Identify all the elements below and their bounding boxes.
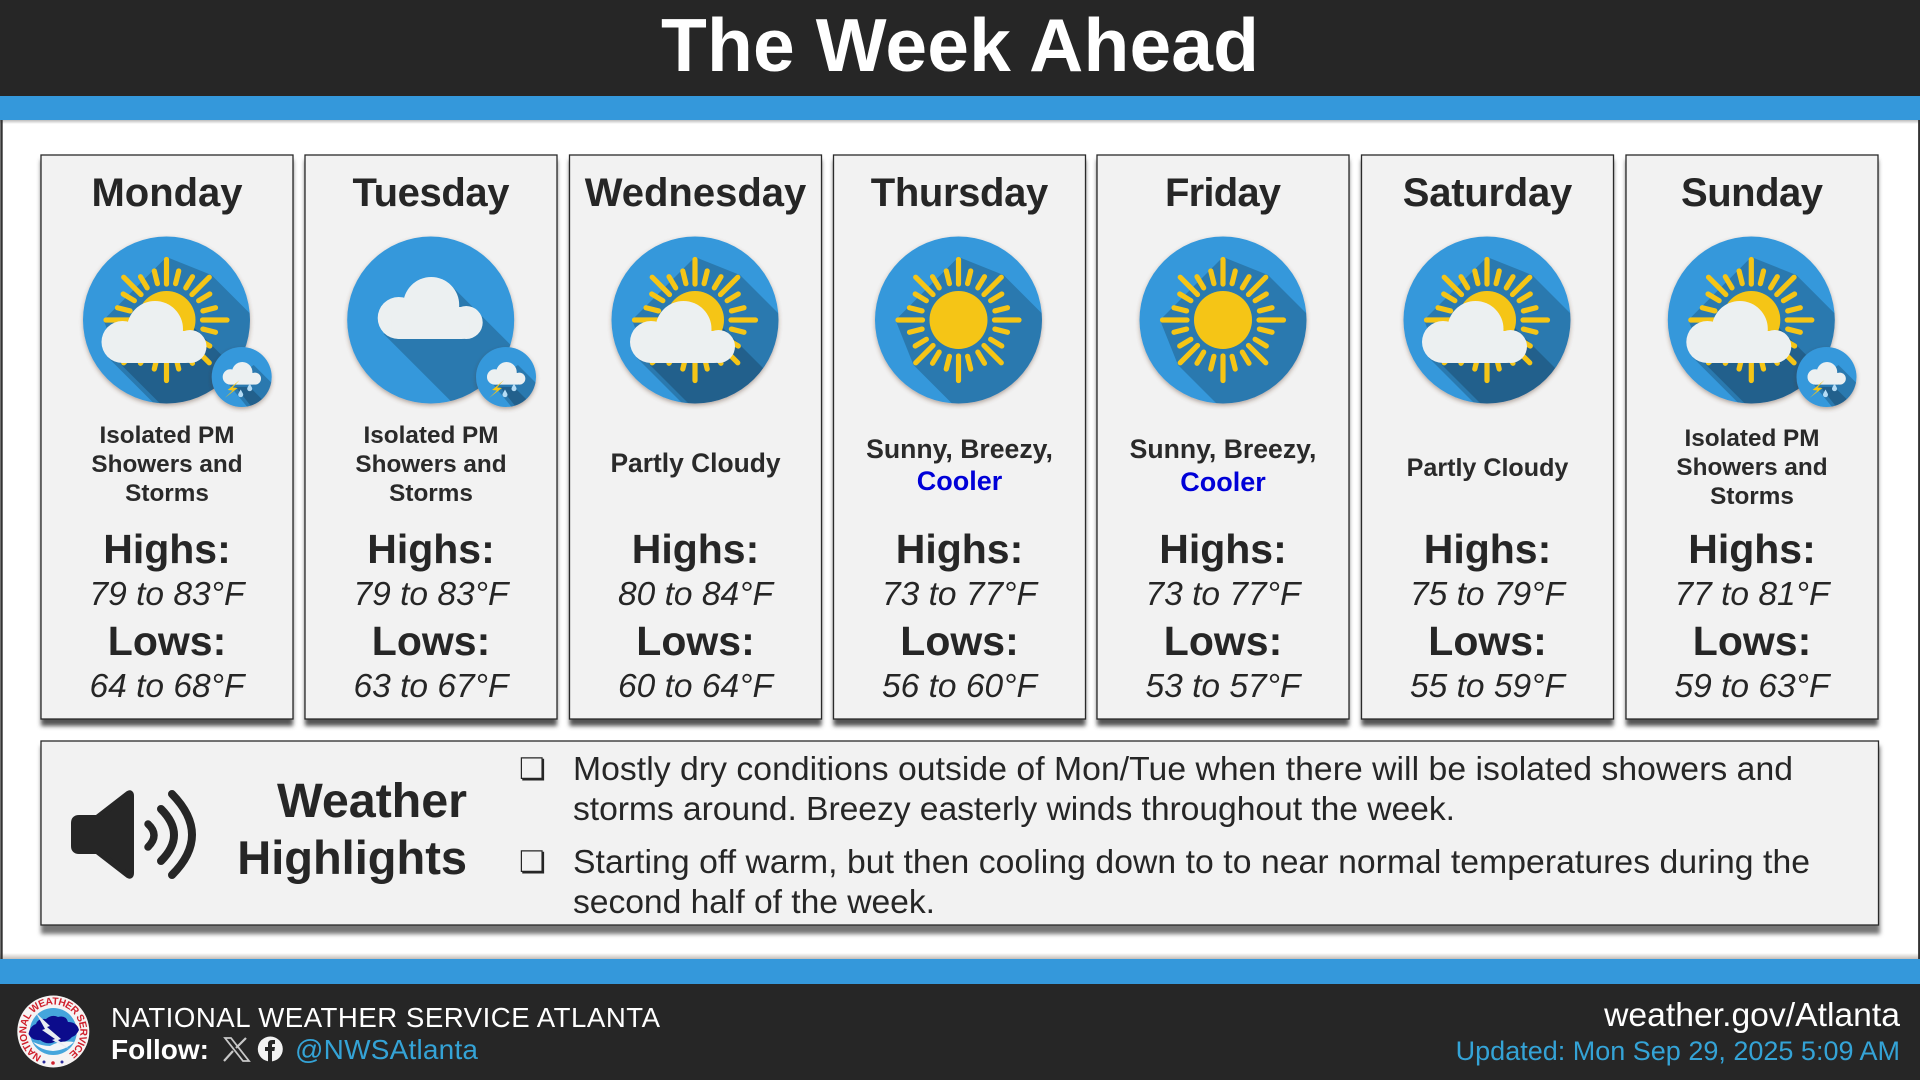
highs [1410,526,1568,613]
lows [618,618,776,705]
footer bar [0,984,1920,1080]
icon: cloudy with storm badge [347,236,653,534]
highs: Highs: [896,526,1023,572]
bullet 2: Starting off warm, but then cooling down to to near normal temperatures during the [573,843,1810,881]
website: weather.gov/Atlanta [1603,996,1900,1034]
forecast text: Storms [1710,483,1794,510]
highs: 80 to 84°F [618,576,776,613]
day name: Thursday [871,171,1049,215]
highs: Highs: [1159,526,1287,572]
footer accent band [0,959,1920,984]
icon: partly cloudy [1404,236,1697,557]
lows: Lows: [1428,618,1547,664]
icon: sunny [1140,236,1368,465]
heading: weather highlights: Weather [277,774,467,828]
panel: Friday [1097,155,1368,726]
forecast text: Showers and [91,451,243,478]
highs: Highs: [103,526,231,572]
day name: Wednesday [585,171,807,215]
bullet 2 [519,843,1810,921]
bullet 2: ❏ [519,845,546,880]
highs: Highs: [632,526,759,572]
icon: sunny [875,236,1104,465]
title: The Week Ahead [661,3,1259,87]
lows: 60 to 64°F [618,668,776,705]
lows: 56 to 60°F [882,668,1040,705]
lows [90,618,247,705]
icon: X logo [224,1038,249,1061]
lows: Lows: [1164,618,1282,664]
icon: Facebook logo [258,1036,283,1062]
forecast text: Isolated PM [1684,425,1820,452]
frame border [2,120,1919,959]
lows: Lows: [636,618,755,664]
highs: 79 to 83°F [354,576,511,613]
forecast text: Isolated PM [99,422,235,449]
panel: Saturday [1362,155,1697,726]
highs: Highs: [1424,526,1551,572]
lows: 63 to 67°F [354,668,511,705]
lows: Lows: [1693,618,1811,664]
bullet 1 [519,750,1793,828]
header bar [0,0,1920,96]
highs: 75 to 79°F [1410,576,1568,613]
header accent band [0,96,1920,120]
bullet 1: Mostly dry conditions outside of Mon/Tue when there will be isolated showers and [573,750,1793,788]
highs [1146,526,1303,613]
day name: Sunday [1681,171,1824,215]
lows: 53 to 57°F [1146,668,1303,705]
highs [618,526,776,613]
lows [1675,618,1832,705]
day name: Tuesday [352,171,510,215]
highs: 73 to 77°F [882,576,1040,613]
lows [1410,618,1568,705]
highs: Highs: [367,526,495,572]
highs: 79 to 83°F [90,576,247,613]
icon: NWS logo: NATIONAL WEATHER SERVICE [19,997,88,1062]
lows [1146,618,1303,705]
header shadow edge [0,120,1920,124]
lows: Lows: [108,618,226,664]
forecast text: Showers and [1676,454,1828,481]
forecast text: Cooler [1180,467,1266,497]
social handle: @NWSAtlanta [295,1034,478,1065]
highs: 73 to 77°F [1146,576,1303,613]
forecast text: Cooler [917,466,1003,496]
forecast text: Isolated PM [363,422,499,449]
panel: Sunday [1626,155,1920,726]
footer shadow edge [0,953,1920,959]
day name: Friday [1165,171,1282,215]
bullet 2: second half of the week. [573,883,935,921]
highs [1675,526,1832,613]
lows: 59 to 63°F [1675,668,1832,705]
panel: weather highlights [41,741,1880,934]
day name: Saturday [1403,171,1573,215]
lows: 64 to 68°F [90,668,247,705]
forecast text: Showers and [355,451,507,478]
forecast text: Sunny, Breezy, [866,434,1053,464]
lows: Lows: [372,618,490,664]
panel: Tuesday [305,155,653,726]
icon: partly cloudy with storm badge [83,236,376,557]
updated time: Updated: Mon Sep 29, 2025 5:09 AM [1456,1036,1900,1066]
follow label: Follow: [111,1034,209,1065]
forecast text: Sunny, Breezy, [1130,434,1316,464]
bullet 1: ❏ [519,752,546,787]
icon: speaker [74,793,192,876]
highs [90,526,247,613]
forecast text: Partly Cloudy [1407,454,1568,482]
forecast text: Storms [389,480,473,507]
forecast text: Storms [125,480,209,507]
icon: partly cloudy with storm badge [1668,236,1920,557]
bullet 1: storms around. Breezy easterly winds throughout the week. [573,790,1455,828]
heading: weather highlights: Highlights [237,831,467,884]
day name: Monday [92,171,243,215]
agency name: NATIONAL WEATHER SERVICE ATLANTA [111,1002,661,1033]
lows: 55 to 59°F [1410,668,1568,705]
highs: Highs: [1688,526,1816,572]
lows [354,618,511,705]
panel: Thursday [834,155,1104,726]
highs [354,526,511,613]
icon: partly cloudy [612,236,905,557]
lows [882,618,1040,705]
forecast text: Partly Cloudy [610,448,781,478]
panel: Monday [41,155,376,726]
panel: Wednesday [570,155,905,726]
lows: Lows: [900,618,1019,664]
heading: weather highlights [237,774,467,884]
highs: 77 to 81°F [1675,576,1832,613]
highs [882,526,1040,613]
